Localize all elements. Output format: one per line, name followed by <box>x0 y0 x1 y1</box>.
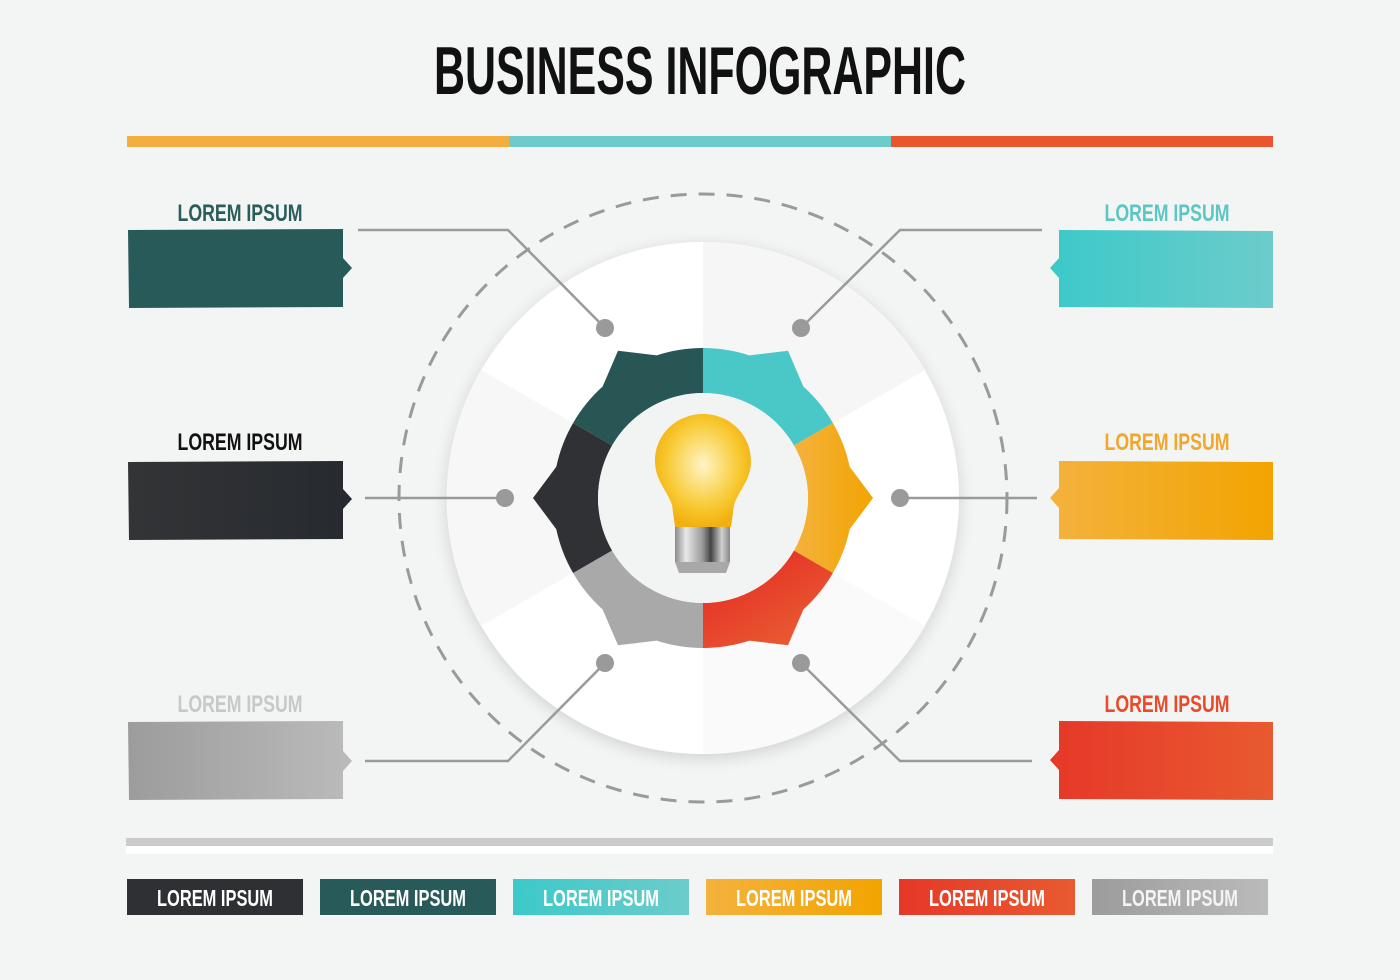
bottom legend buttons: LOREM IPSUM <box>929 885 1045 911</box>
panel: left top <box>128 200 352 308</box>
bottom legend buttons: LOREM IPSUM <box>157 885 273 911</box>
title: BUSINESS INFOGRAPHIC <box>434 33 966 109</box>
dashed ring <box>399 194 1007 802</box>
white disc <box>447 242 959 754</box>
top color bar <box>127 136 1273 147</box>
bottom divider <box>126 838 1273 854</box>
panel: left bottom <box>128 691 352 800</box>
panel: left bottom: LOREM IPSUM <box>178 691 302 718</box>
bottom legend buttons: LOREM IPSUM <box>736 885 852 911</box>
icon: light bulb <box>655 414 751 573</box>
panel: right middle: LOREM IPSUM <box>1104 429 1230 456</box>
connectors <box>358 230 1042 761</box>
panel: right middle <box>1050 429 1273 540</box>
panel: right bottom <box>1050 691 1273 800</box>
panel: right bottom: LOREM IPSUM <box>1104 691 1230 718</box>
gear <box>533 313 873 683</box>
panel: left top: LOREM IPSUM <box>178 200 302 227</box>
bottom legend buttons: LOREM IPSUM <box>1122 885 1238 911</box>
panel: right top <box>1050 200 1273 308</box>
panel: right top: LOREM IPSUM <box>1104 200 1230 227</box>
connector dots <box>496 319 909 672</box>
panel: left middle <box>128 429 352 540</box>
bottom legend buttons: LOREM IPSUM <box>350 885 466 911</box>
central diagram <box>399 194 1007 802</box>
panel: left middle: LOREM IPSUM <box>178 429 302 456</box>
bottom legend buttons <box>127 879 1268 915</box>
bottom legend buttons: LOREM IPSUM <box>543 885 659 911</box>
